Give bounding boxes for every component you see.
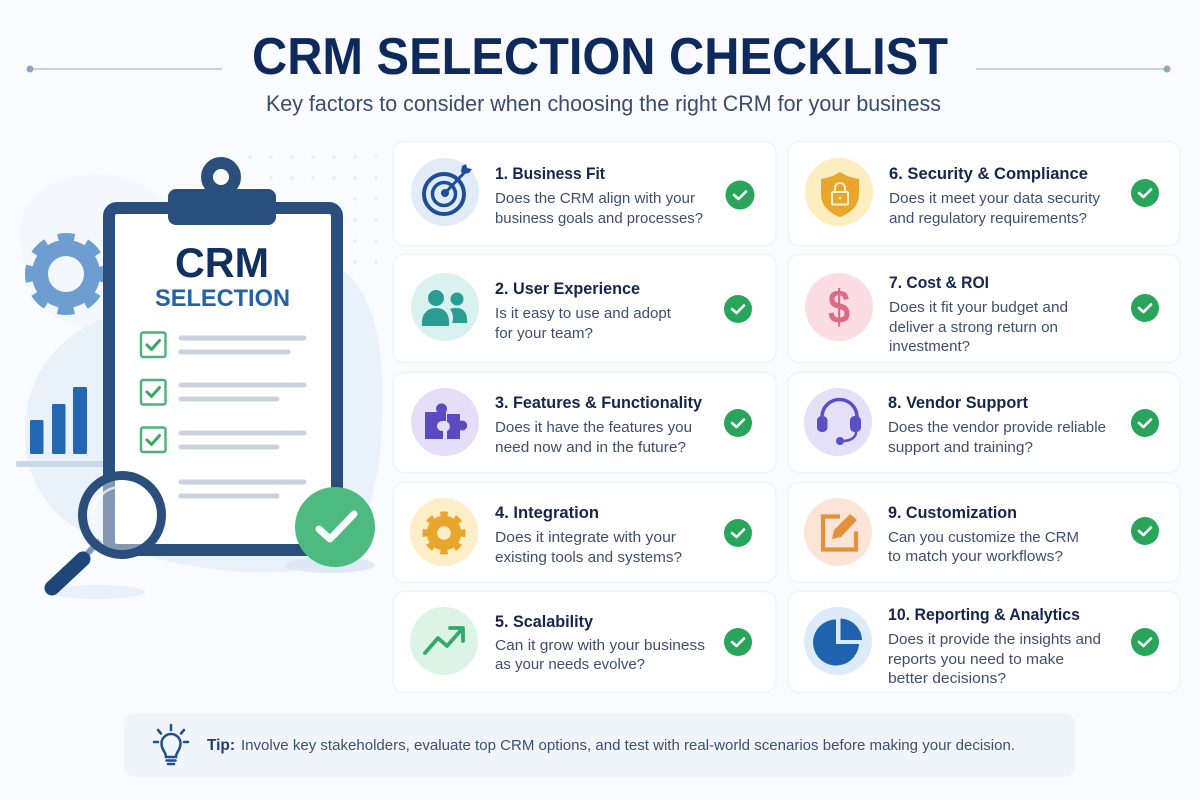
check badge bbox=[1131, 517, 1159, 545]
checklist rows bbox=[141, 332, 304, 496]
description: Is it easy to use and adopt bbox=[495, 305, 672, 322]
title: CRM SELECTION CHECKLIST bbox=[252, 28, 948, 86]
description: need now and in the future? bbox=[495, 439, 686, 456]
heading: 8. Vendor Support bbox=[888, 393, 1028, 412]
check badge bbox=[724, 519, 752, 547]
icon: headset bbox=[804, 388, 872, 456]
description: Does the CRM align with your bbox=[495, 190, 695, 207]
description: Does the vendor provide reliable bbox=[888, 419, 1106, 436]
check badge bbox=[1131, 179, 1159, 207]
check badge bbox=[726, 180, 754, 210]
description bbox=[889, 299, 1068, 355]
description: existing tools and systems? bbox=[495, 549, 682, 566]
check badge bbox=[724, 295, 752, 323]
description bbox=[495, 529, 682, 566]
left header rule bbox=[26, 66, 222, 72]
card 7: cost and ROI bbox=[788, 254, 1180, 362]
description: business goals and processes? bbox=[495, 210, 703, 227]
icon: users bbox=[411, 273, 479, 341]
heading: 7. Cost & ROI bbox=[889, 273, 989, 292]
description bbox=[888, 419, 1106, 456]
card 4: integration bbox=[393, 482, 776, 582]
right header rule bbox=[976, 66, 1170, 72]
subtitle: Key factors to consider when choosing the right CRM for your business bbox=[266, 91, 941, 116]
description bbox=[888, 631, 1101, 687]
card 5: scalability bbox=[393, 592, 776, 692]
clipboard subheading: SELECTION bbox=[155, 285, 290, 312]
heading: 5. Scalability bbox=[495, 612, 594, 631]
tip label: Tip: bbox=[207, 737, 235, 754]
icon: pie chart bbox=[804, 607, 872, 675]
description: reports you need to make bbox=[888, 651, 1064, 668]
icon: edit bbox=[804, 498, 872, 566]
description: Can you customize the CRM bbox=[888, 529, 1079, 546]
description: Does it meet your data security bbox=[889, 190, 1100, 207]
icon: target bbox=[411, 158, 479, 226]
bar chart bbox=[16, 387, 106, 467]
card 9: customization bbox=[788, 482, 1180, 582]
description: better decisions? bbox=[888, 670, 1006, 687]
check badge bbox=[1131, 294, 1159, 322]
card 1: business fit bbox=[393, 142, 776, 246]
clipboard heading: CRM bbox=[175, 239, 269, 286]
card 10: reporting and analytics bbox=[788, 592, 1180, 692]
icon: puzzle bbox=[411, 388, 479, 456]
description: Can it grow with your business bbox=[495, 637, 705, 654]
heading: 10. Reporting & Analytics bbox=[888, 605, 1080, 624]
check badge bbox=[1131, 628, 1159, 656]
icon: dollar bbox=[805, 273, 873, 341]
card 3: features and functionality bbox=[393, 372, 776, 472]
heading: 1. Business Fit bbox=[495, 164, 605, 183]
clipboard clip bbox=[168, 163, 276, 225]
description: investment? bbox=[889, 338, 970, 355]
icon: dollar: $ bbox=[828, 280, 850, 333]
tip bar bbox=[124, 713, 1075, 777]
description bbox=[889, 190, 1100, 227]
description: Does it integrate with your bbox=[495, 529, 676, 546]
clipboard board bbox=[109, 163, 337, 550]
heading: 4. Integration bbox=[495, 503, 599, 522]
illustration: CRM clipboard bbox=[16, 155, 383, 599]
description bbox=[495, 190, 703, 227]
check badge bbox=[724, 409, 752, 437]
icon: large green check badge bbox=[285, 487, 375, 573]
heading: 2. User Experience bbox=[495, 279, 640, 298]
tip text: Involve key stakeholders, evaluate top CRM options, and test with real-world scenarios before making your decision. bbox=[241, 737, 1015, 754]
description: Does it provide the insights and bbox=[888, 631, 1101, 648]
description: Does it have the features you bbox=[495, 419, 692, 436]
heading: 3. Features & Functionality bbox=[495, 393, 703, 412]
description: support and training? bbox=[888, 439, 1033, 456]
icon: light bulb bbox=[154, 725, 188, 764]
heading: 6. Security & Compliance bbox=[889, 164, 1088, 183]
heading: 9. Customization bbox=[888, 503, 1017, 522]
icon: magnifying glass bbox=[49, 476, 162, 599]
card 6: security and compliance bbox=[788, 142, 1180, 246]
icon: gear bbox=[410, 498, 478, 566]
description: and regulatory requirements? bbox=[889, 210, 1087, 227]
icon: settings gear bbox=[30, 238, 102, 310]
icon: shield lock bbox=[805, 158, 873, 226]
icon: growth arrow bbox=[410, 607, 478, 675]
description: for your team? bbox=[495, 325, 593, 342]
description bbox=[888, 529, 1079, 565]
description bbox=[495, 419, 692, 456]
card 8: vendor support bbox=[788, 372, 1180, 472]
description: to match your workflows? bbox=[888, 548, 1063, 565]
description: Does it fit your budget and bbox=[889, 299, 1068, 316]
card 2: user experience bbox=[393, 254, 776, 362]
check badge bbox=[724, 628, 752, 656]
background blobs bbox=[20, 155, 383, 572]
check badge bbox=[1131, 409, 1159, 437]
description: as your needs evolve? bbox=[495, 656, 645, 673]
description bbox=[495, 305, 672, 342]
description: deliver a strong return on bbox=[889, 319, 1058, 336]
description bbox=[495, 637, 705, 673]
